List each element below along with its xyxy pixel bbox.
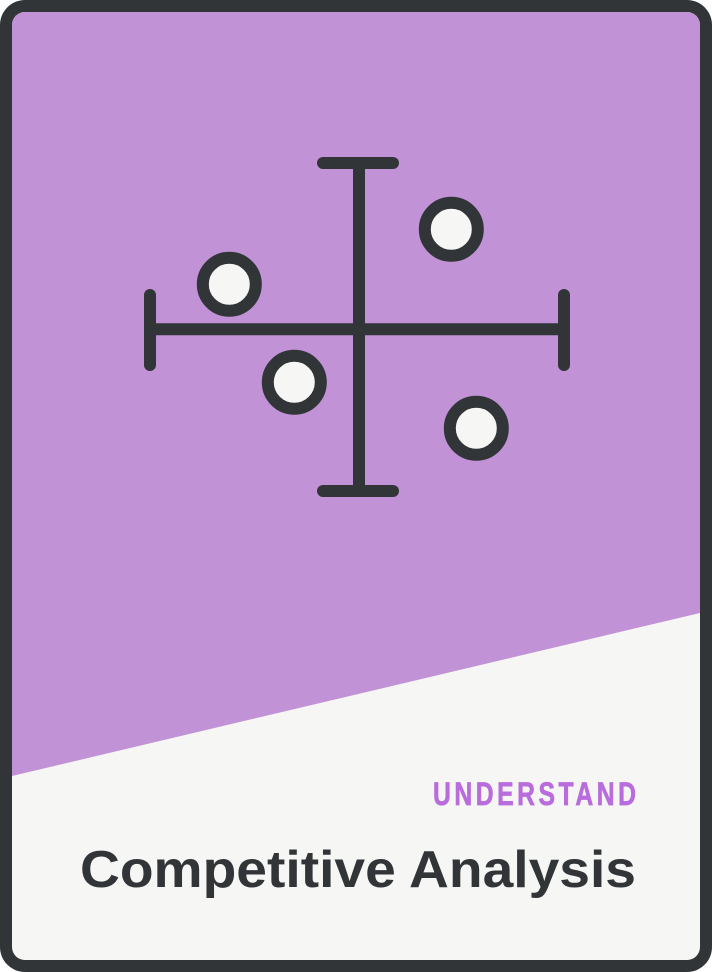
icon: positioning map	[150, 163, 564, 491]
data point: bottom right	[450, 402, 503, 455]
data point: top left	[203, 258, 256, 311]
panel: purple diagonal background	[12, 12, 700, 776]
horizontal axis	[150, 295, 564, 365]
data point: top right	[425, 203, 478, 256]
data point: bottom left	[268, 356, 321, 409]
title: Competitive Analysis	[80, 841, 636, 899]
category label: UNDERSTAND	[433, 777, 636, 813]
vertical axis	[323, 163, 393, 491]
